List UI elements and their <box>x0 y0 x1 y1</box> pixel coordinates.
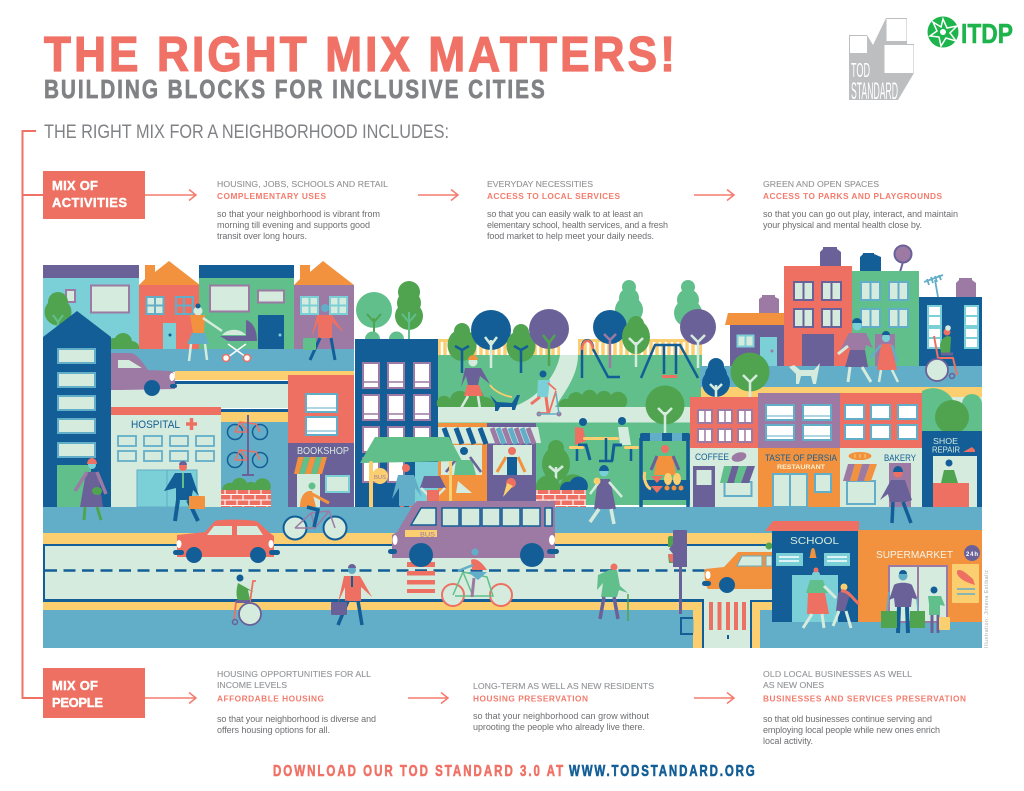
shoe repair: REPAIR <box>932 444 960 454</box>
pedestrian by the bakery <box>880 466 912 523</box>
mother and child at school <box>803 568 859 628</box>
school: SCHOOL <box>790 535 839 547</box>
bus <box>388 501 559 567</box>
street illustration <box>43 246 982 648</box>
people at bus stop <box>392 464 446 527</box>
text block: access to local services: EVERYDAY NECESSITIES <box>487 179 593 189</box>
text block: housing preservation <box>473 681 654 732</box>
text block: access to local services: food market to help meet your daily needs. <box>487 231 654 241</box>
orange car <box>702 542 775 593</box>
logo: ITDP: ITDP <box>961 18 1013 49</box>
woman walking dog <box>460 355 520 411</box>
title: THE RIGHT MIX MATTERS! <box>44 27 675 82</box>
dark blue apartment tower <box>43 311 111 507</box>
arrow <box>145 692 196 704</box>
coral car <box>173 520 280 563</box>
bike racks <box>221 409 288 507</box>
park <box>437 339 702 505</box>
label: mix of activities: ACTIVITIES <box>52 195 127 210</box>
text block: access to parks: ACCESS TO PARKS AND PLAYGROUNDS <box>763 191 942 201</box>
text block: businesses and services preservation: so that old businesses continue serving and <box>763 714 932 724</box>
arrow <box>408 692 448 704</box>
playground <box>582 340 698 378</box>
text block: access to parks: GREEN AND OPEN SPACES <box>763 179 879 189</box>
woman in purple dress <box>590 465 622 524</box>
text block: access to parks: so that you can go out play, interact, and maintain <box>763 209 958 219</box>
text block: affordable housing: AFFORDABLE HOUSING <box>217 694 324 704</box>
hospital <box>111 407 221 507</box>
bus shelter: BUS <box>374 475 386 481</box>
cyclist coral wheels <box>442 548 512 606</box>
text block: affordable housing: INCOME LEVELS <box>217 680 287 690</box>
text block: housing preservation: so that your neighborhood can grow without <box>473 711 649 721</box>
text block: access to local services: elementary school, health services, and a fresh <box>487 220 668 230</box>
text block: access to parks: your physical and mental health close by. <box>763 220 922 230</box>
trees by the street <box>702 352 770 397</box>
label: mix of activities <box>43 171 145 219</box>
bus shelter <box>360 437 462 519</box>
wheelchair user lower <box>232 574 261 625</box>
text block: complementary uses: morning till evening and supports good <box>217 220 370 230</box>
left housing row <box>43 261 354 353</box>
text block: complementary uses <box>217 179 388 241</box>
shoppers at supermarket <box>881 570 950 633</box>
couple at table <box>569 417 639 461</box>
restaurant <box>758 393 840 507</box>
wheelchair user upper <box>926 325 957 381</box>
hospital: HOSPITAL <box>131 419 180 431</box>
label: mix of people: PEOPLE <box>52 695 103 710</box>
upper right street <box>700 366 982 434</box>
bookshop: BOOKSHOP <box>297 445 349 457</box>
bus: BUS <box>420 532 436 538</box>
bracket connector <box>22 131 45 698</box>
bakery: BAKERY <box>884 453 916 463</box>
mid apartment block <box>355 281 438 507</box>
shoe repair: SHOE <box>933 436 958 446</box>
terrace street <box>111 349 354 408</box>
park trees <box>448 280 716 373</box>
businessman with purple case <box>331 564 372 625</box>
coffee shop <box>690 397 758 507</box>
man with green bag <box>303 304 344 360</box>
arrow <box>145 190 196 200</box>
text block: businesses and services preservation: OLD LOCAL BUSINESSES AS WELL <box>763 669 912 679</box>
brick planter and tree <box>536 440 588 507</box>
supermarket: 24h <box>966 552 978 558</box>
logo: ITDP <box>928 16 1013 49</box>
main road <box>43 507 982 648</box>
woman with stroller <box>187 304 257 362</box>
label: mix of people <box>43 668 145 718</box>
text: STANDARD <box>851 78 898 105</box>
food kiosks <box>415 423 541 505</box>
text block: complementary uses: transit over long hours. <box>217 231 307 241</box>
text block: access to parks <box>763 179 958 230</box>
dog <box>789 363 820 384</box>
text block: complementary uses: HOUSING, JOBS, SCHOOLS AND RETAIL <box>217 179 388 189</box>
text block: affordable housing: so that your neighborhood is diverse and <box>217 714 376 724</box>
text block: businesses and services preservation <box>763 669 966 746</box>
coffee shop: COFFEE <box>695 452 729 463</box>
school <box>765 521 859 622</box>
label: mix of people: MIX OF <box>52 678 98 693</box>
text block: complementary uses: COMPLEMENTARY USES <box>217 191 326 201</box>
arrow <box>694 190 734 200</box>
cyclist orange <box>284 482 346 540</box>
brick planter <box>221 478 271 507</box>
text block: access to local services: so that you can easily walk to at least an <box>487 209 643 219</box>
text block: businesses and services preservation: AS NEW ONES <box>763 680 824 690</box>
text block: affordable housing: HOUSING OPPORTUNITIES FOR ALL <box>217 669 371 679</box>
text block: housing preservation: uprooting the people who already live there. <box>473 722 645 732</box>
pedestrian woman with green bag <box>75 458 106 520</box>
label: mix of activities: MIX OF <box>52 178 98 193</box>
text block: housing preservation: LONG-TERM AS WELL AS NEW RESIDENTS <box>473 681 654 691</box>
traffic light <box>668 530 687 614</box>
text block: affordable housing: offers housing options for all. <box>217 725 330 735</box>
logo: TOD Standard <box>849 18 914 105</box>
shoe repair <box>922 431 982 507</box>
text block: access to local services <box>487 179 668 241</box>
purple car <box>111 353 177 396</box>
illustration credit: Illustration: Jimena Estibaliz <box>984 570 990 648</box>
restaurant: TASTE OF PERSIA <box>765 453 838 464</box>
footer call to action <box>273 761 755 779</box>
supermarket <box>858 530 982 622</box>
kid on scooter <box>531 370 562 416</box>
arrow <box>694 692 734 704</box>
old man with cane <box>597 564 628 621</box>
arrow <box>418 190 458 200</box>
supermarket: SUPERMARKET <box>876 549 954 561</box>
text block: access to local services: ACCESS TO LOCAL SERVICES <box>487 191 620 201</box>
logo: TOD Standard: TOD <box>851 60 870 82</box>
woman and girl <box>838 318 898 382</box>
businessman with orange case <box>164 461 205 521</box>
round tree and fruit stall <box>640 386 690 507</box>
text block: businesses and services preservation: employing local people while new ones enrich <box>763 725 940 735</box>
text block: businesses and services preservation: local activity. <box>763 736 813 746</box>
bakery <box>840 393 922 507</box>
bookshop <box>288 375 354 507</box>
footer call to action: DOWNLOAD OUR TOD STANDARD 3.0 AT <box>273 761 564 779</box>
text block: businesses and services preservation: BUSINESSES AND SERVICES PRESERVATION <box>763 694 966 704</box>
upper right buildings <box>725 246 982 367</box>
footer call to action: WWW.TODSTANDARD.ORG <box>569 761 755 779</box>
subtitle: BUILDING BLOCKS FOR INCLUSIVE CITIES <box>44 75 545 104</box>
text block: housing preservation: HOUSING PRESERVATION <box>473 694 588 704</box>
text block: affordable housing <box>217 669 376 735</box>
text block: complementary uses: so that your neighborhood is vibrant from <box>217 209 380 219</box>
section heading: THE RIGHT MIX FOR A NEIGHBORHOOD INCLUDES: <box>44 122 449 143</box>
restaurant: RESTAURANT <box>777 464 826 471</box>
